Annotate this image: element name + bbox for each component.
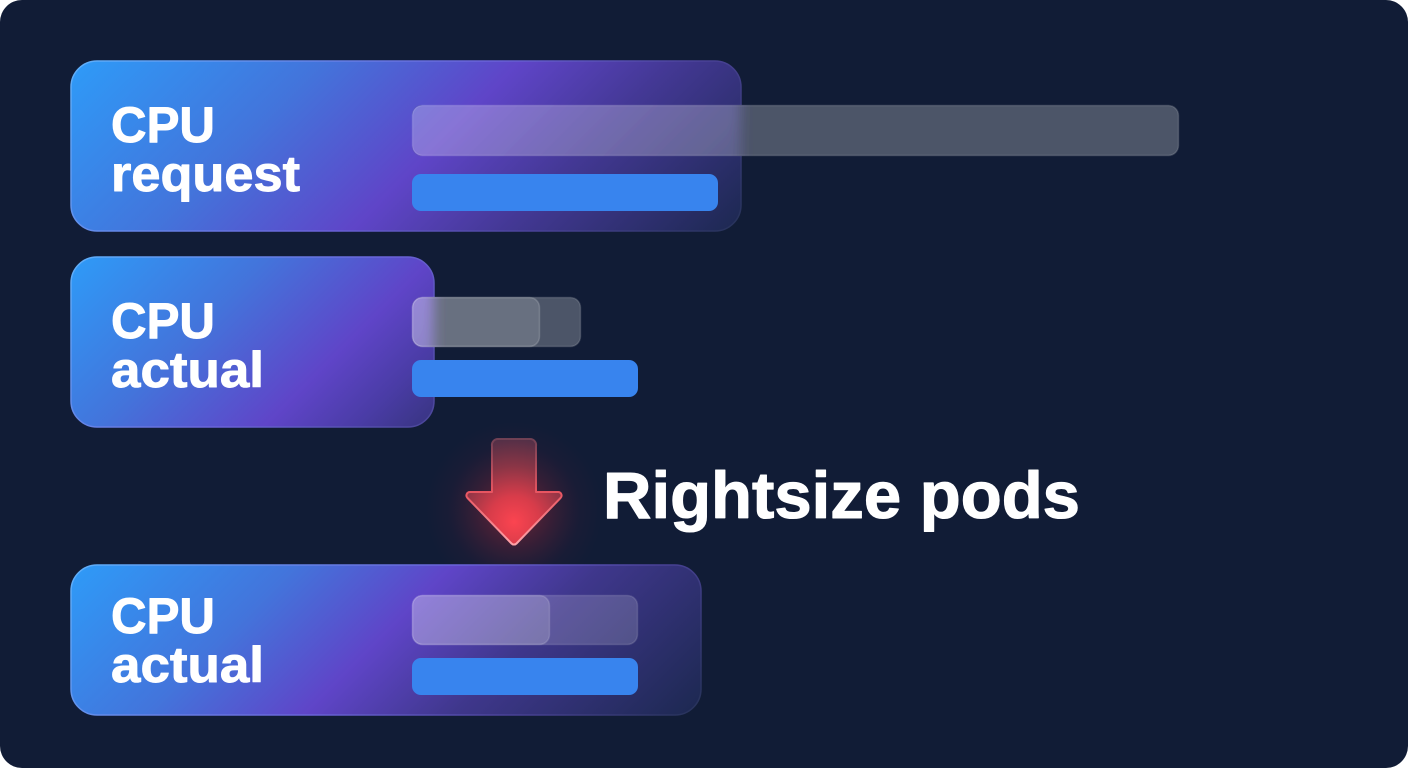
heading: Rightsize pods: Rightsize pods (603, 458, 1080, 532)
panel: CPU actual after rightsizing (71, 565, 701, 715)
label: CPU actual: actual (111, 637, 264, 693)
solid bar: actual (412, 360, 638, 397)
label: CPU actual: CPU (111, 588, 215, 644)
label: CPU actual (111, 293, 264, 398)
panel: CPU request (71, 61, 1179, 231)
ghost bar: rightsized (412, 596, 638, 644)
ghost bar: request (412, 104, 1180, 156)
label: CPU actual: actual (111, 342, 264, 398)
icon: down arrow (426, 422, 602, 598)
solid bar: rightsized (412, 658, 638, 695)
label: CPU request: CPU (111, 97, 215, 153)
label: CPU actual: CPU (111, 293, 215, 349)
panel: CPU actual (71, 257, 638, 427)
solid bar: request (412, 174, 718, 211)
ghost bar: actual (412, 296, 582, 348)
label: CPU request: request (111, 146, 300, 202)
label: CPU request (111, 97, 300, 202)
label: CPU actual (111, 588, 264, 693)
